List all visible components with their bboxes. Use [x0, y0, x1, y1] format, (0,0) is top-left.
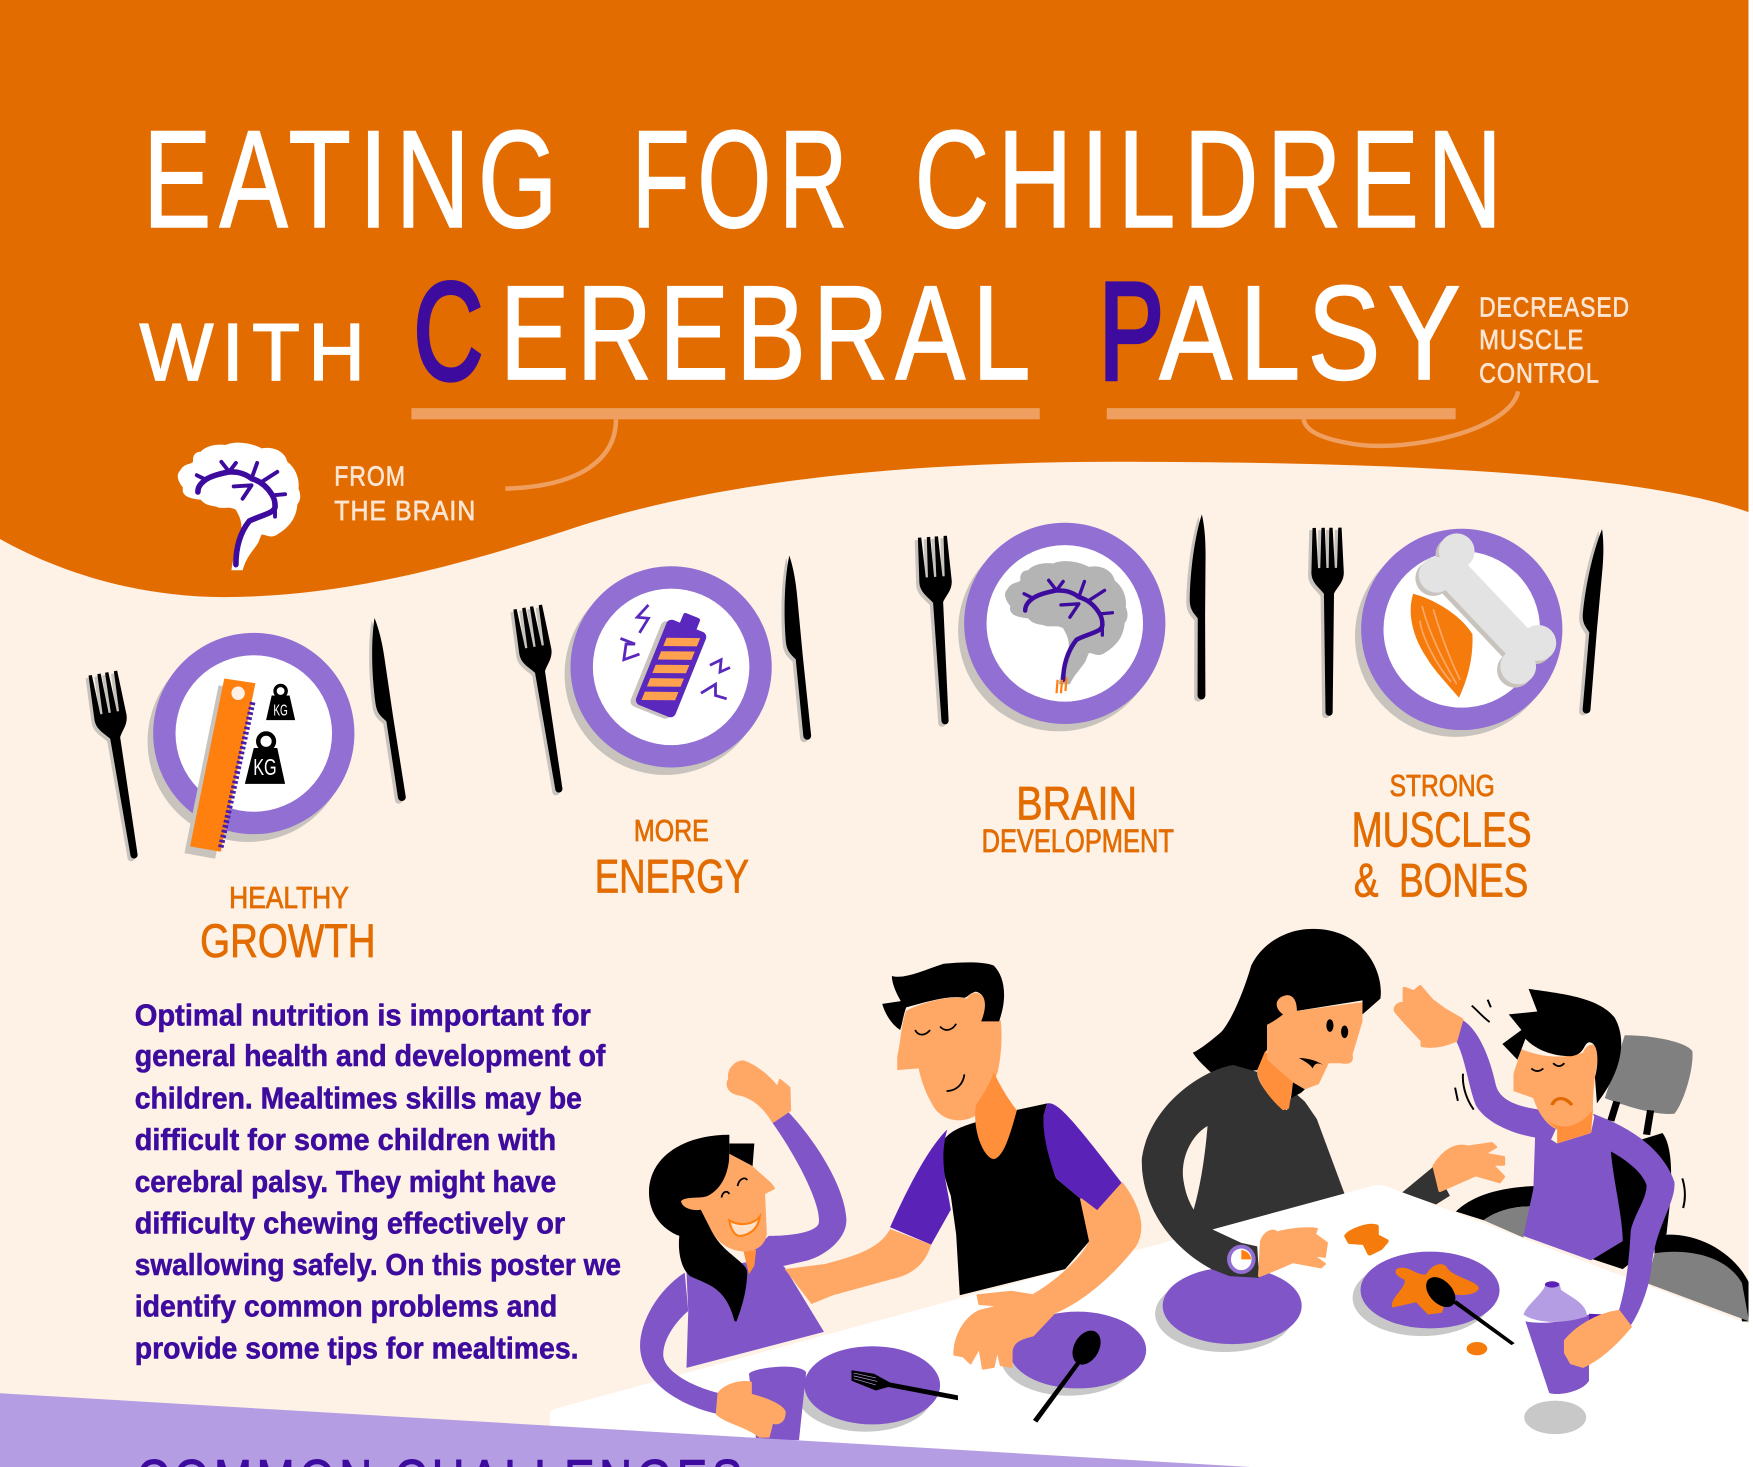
- intro paragraph: Optimal nutrition is important for: [135, 999, 591, 1032]
- icon: bone: [1415, 533, 1556, 688]
- table top: [550, 1185, 1749, 1467]
- knife: [775, 555, 812, 743]
- icon: small weight: KG: [273, 703, 288, 720]
- right page margin: [1749, 0, 1753, 1467]
- callout: from the brain: THE BRAIN: [334, 495, 476, 526]
- icon: large weight: KG: [253, 754, 277, 780]
- panel: more energy: [508, 555, 812, 902]
- fork: [84, 670, 151, 864]
- fork: [913, 536, 962, 728]
- intro paragraph: swallowing safely. On this poster we: [135, 1249, 621, 1282]
- icon: grey brain: [1005, 561, 1128, 693]
- spilled food: [1347, 1226, 1485, 1353]
- man's forearm and hand: [954, 1184, 1140, 1369]
- label: more energy: ENERGY: [595, 849, 749, 902]
- arms, plates and cutlery in front of table: left side: [640, 1184, 1146, 1440]
- band: common challenges: [0, 1393, 1250, 1467]
- panel: healthy growth: [84, 617, 407, 967]
- label: healthy growth: HEALTHY: [229, 882, 349, 915]
- woman: [1142, 929, 1504, 1276]
- knife: [1185, 514, 1209, 702]
- icon: small weight: [266, 685, 295, 720]
- fork: [508, 604, 576, 798]
- intro paragraph: general health and development of: [135, 1040, 606, 1073]
- intro paragraph: provide some tips for mealtimes.: [135, 1332, 579, 1365]
- plate with food and spoon: [1353, 1252, 1515, 1345]
- title line 1: CHILDREN: [915, 103, 1510, 257]
- label: more energy: [595, 815, 749, 902]
- title purple initials: [414, 255, 1164, 409]
- title purple initials: P: [1099, 255, 1164, 409]
- knife: [1569, 528, 1609, 716]
- callout: decreased muscle control: [1479, 291, 1630, 388]
- callout: decreased muscle control: DECREASED: [1479, 291, 1630, 322]
- label: strong muscles and bones: MUSCLES: [1352, 802, 1532, 857]
- intro paragraph: difficult for some children with: [135, 1124, 556, 1157]
- icon: large weight: [245, 734, 285, 784]
- knife: [361, 617, 407, 805]
- icon: muscle: [1411, 594, 1473, 698]
- label: healthy growth: GROWTH: [200, 914, 376, 967]
- plate: [958, 523, 1165, 731]
- plate: [565, 566, 772, 775]
- label: strong muscles and bones: STRONG: [1390, 770, 1495, 803]
- callout: from the brain: [334, 460, 476, 526]
- icon: battery: [629, 606, 712, 722]
- orange header wave: [0, 0, 1749, 597]
- callout: decreased muscle control: MUSCLE: [1479, 324, 1584, 355]
- woman's forearm, watch and hand: [1142, 1157, 1327, 1278]
- boy torso and raised arm: [1395, 986, 1685, 1383]
- intro paragraph: difficulty chewing effectively or: [135, 1207, 565, 1240]
- icon: lightning marks: [620, 605, 730, 699]
- sippy cup: [1523, 1281, 1606, 1434]
- label: more energy: MORE: [634, 815, 709, 848]
- man: [785, 962, 1122, 1304]
- empty plate: [1155, 1267, 1302, 1352]
- plate: [1355, 529, 1562, 737]
- label: strong muscles and bones: [1352, 770, 1532, 907]
- boy's hand: [1565, 1311, 1631, 1367]
- panel: strong muscles and bones: [1307, 528, 1609, 907]
- icon: white brain: [178, 443, 300, 570]
- icon: ruler: [184, 678, 255, 859]
- label: healthy growth: [200, 882, 376, 967]
- arms, plates and cutlery in front of table: right side: [1142, 1114, 1675, 1434]
- title line 2: ALSY: [1159, 259, 1468, 408]
- intro paragraph: [135, 999, 621, 1365]
- plate with fork: [797, 1346, 958, 1432]
- title line 1: EATING: [143, 103, 566, 257]
- title purple initials: C: [414, 255, 483, 409]
- panel: brain development: [913, 514, 1209, 859]
- title line 2: WITH: [140, 308, 373, 398]
- plate: [148, 633, 354, 842]
- intro paragraph: children. Mealtimes skills may be: [135, 1082, 582, 1115]
- boy's arm: [1593, 1114, 1675, 1327]
- title line 1: [143, 103, 1510, 257]
- chair headrest and frame: [1456, 1035, 1749, 1321]
- label: brain development: [982, 777, 1174, 859]
- plate with spoon: [1001, 1312, 1146, 1423]
- intro paragraph: identify common problems and: [135, 1291, 557, 1324]
- callout: decreased muscle control: CONTROL: [1479, 357, 1600, 388]
- title line 1: FOR: [632, 103, 855, 257]
- girl's arm, cup and hand: [640, 1273, 806, 1440]
- woman and boy, behind table: [1142, 929, 1749, 1383]
- callout: from the brain: FROM: [334, 460, 406, 491]
- girl raised arm and torso: [649, 1061, 846, 1368]
- illustration: family at table: [550, 929, 1749, 1467]
- label: brain development: BRAIN: [1016, 777, 1137, 830]
- fork: [1307, 528, 1346, 718]
- title line 2: EREBRAL: [500, 259, 1037, 408]
- label: strong muscles and bones: & BONES: [1354, 854, 1528, 907]
- title line 2: [140, 259, 1468, 408]
- underlines and callout curves: [411, 391, 1518, 489]
- intro paragraph: cerebral palsy. They might have: [135, 1166, 556, 1199]
- man and girl, behind table: [649, 962, 1122, 1368]
- label: brain development: DEVELOPMENT: [982, 823, 1174, 859]
